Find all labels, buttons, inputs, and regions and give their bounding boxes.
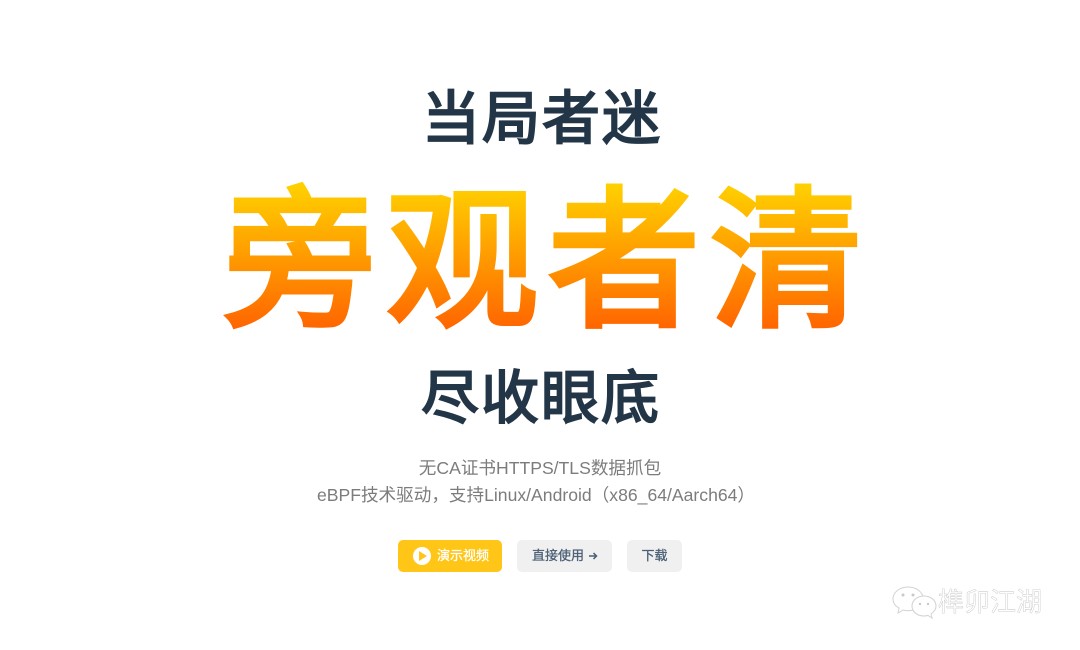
button: download: 下载 — [641, 548, 668, 563]
button: use directly — [517, 540, 612, 572]
icon: play — [413, 547, 431, 565]
heading: main gradient title: 旁观者清 — [224, 177, 872, 347]
icon: arrow — [589, 552, 598, 560]
watermark: WeChat account: 榫卯江湖 — [938, 587, 1042, 617]
heading: third line: 尽收眼底 — [421, 366, 661, 431]
text block: subtitle: eBPF技术驱动，支持Linux/Android（x86_64/Aarch64） — [317, 485, 755, 505]
button: demo video: 演示视频 — [437, 548, 489, 563]
watermark: WeChat account — [892, 586, 1042, 619]
text block: subtitle — [317, 458, 755, 505]
button: download — [627, 540, 682, 572]
button: demo video — [398, 540, 502, 572]
button: use directly: 直接使用 — [532, 548, 584, 563]
icon: chat bubbles — [892, 586, 936, 619]
title group — [223, 86, 872, 431]
text block: subtitle: 无CA证书HTTPS/TLS数据抓包 — [419, 458, 661, 478]
heading: top line: 当局者迷 — [422, 86, 662, 152]
